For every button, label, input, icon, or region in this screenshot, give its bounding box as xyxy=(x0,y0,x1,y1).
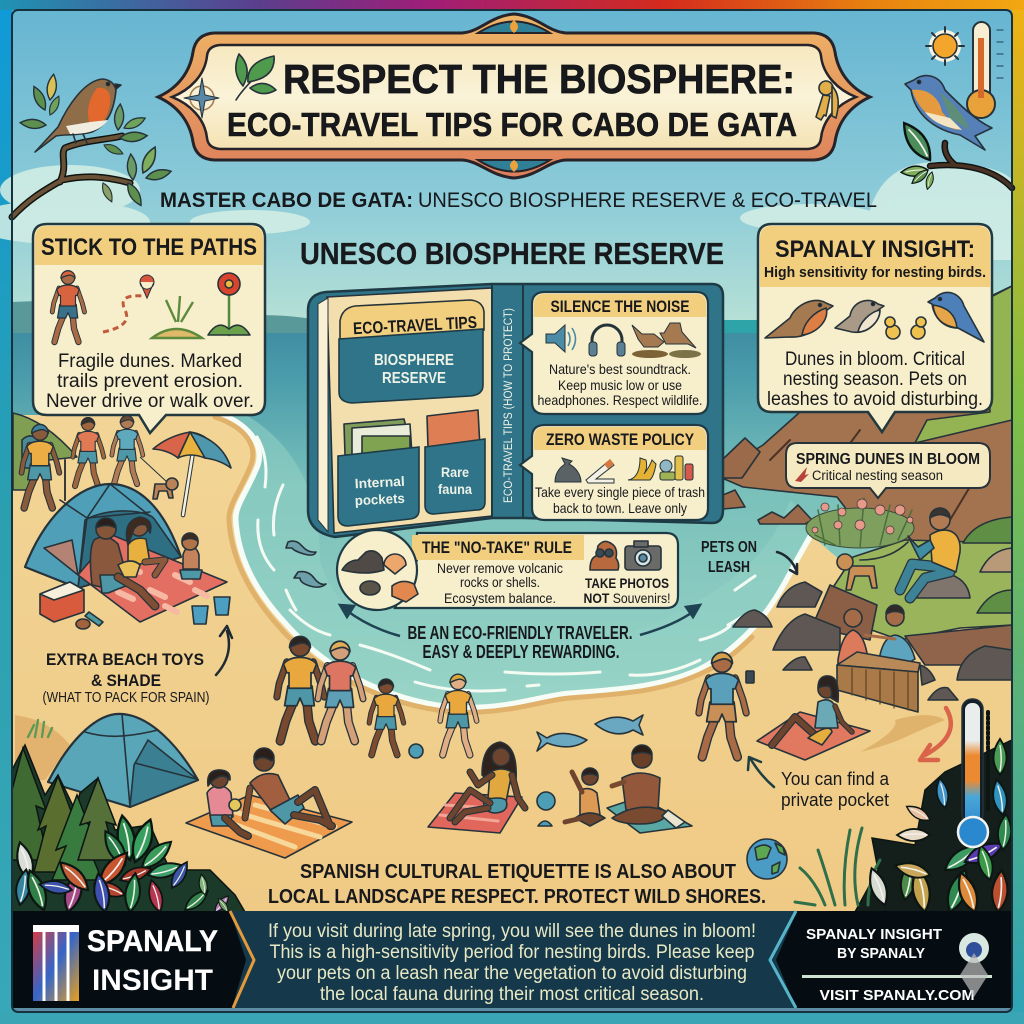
credit text: SPANALY INSIGHT xyxy=(806,926,942,943)
icon: flower xyxy=(208,273,250,335)
heading: ZERO WASTE POLICY xyxy=(546,430,695,449)
branch with bluebird xyxy=(897,76,1012,190)
sand beach xyxy=(12,415,1012,915)
people at kiosk xyxy=(838,605,915,670)
label: pets on leash: LEASH xyxy=(708,559,750,576)
footer message: This is a high-sensitivity period for nesting birds. Please keep xyxy=(270,942,754,963)
flower bush xyxy=(806,498,914,548)
etiquette text: LOCAL LANDSCAPE RESPECT. PROTECT WILD SHORES. xyxy=(268,886,766,908)
branch with robin xyxy=(12,74,172,217)
card: zero waste policy: back to town. Leave only xyxy=(553,500,687,516)
icon: bottles xyxy=(660,456,693,480)
brown cliff xyxy=(722,286,1012,545)
dune grass xyxy=(28,720,52,737)
icon: birds on nest xyxy=(632,323,696,348)
cooler and toys xyxy=(40,582,230,629)
shoreline foam xyxy=(215,415,813,710)
body text: Dunes in bloom. Critical xyxy=(785,349,965,370)
eco-friendly text xyxy=(408,623,632,662)
callout: stick to the paths: trails prevent erosion. xyxy=(57,371,243,392)
logo text: SPANALY xyxy=(87,925,218,958)
card: silence the noise xyxy=(520,292,708,414)
couple on blanket xyxy=(207,748,332,836)
icon: speaker xyxy=(546,325,565,352)
shallow water xyxy=(215,400,830,680)
pocket: rare fauna xyxy=(425,439,485,514)
card: zero waste policy xyxy=(520,425,708,520)
icon: compass xyxy=(184,78,219,118)
family on blanket xyxy=(90,517,202,606)
umbrella xyxy=(153,432,231,515)
book: Rare xyxy=(441,465,469,480)
footer banner: INSIGHT xyxy=(92,964,213,997)
heading: THE "NO-TAKE" RULE xyxy=(422,538,572,557)
icon: cigarette xyxy=(586,460,614,483)
brown boulder xyxy=(812,585,877,640)
icon: dune grass xyxy=(152,296,202,338)
icon: robin xyxy=(35,79,121,152)
icon: birds xyxy=(765,292,984,342)
tan rock xyxy=(980,548,1012,572)
subtitle: UNESCO BIOSPHERE RESERVE & ECO-TRAVEL xyxy=(418,189,877,212)
arrow right xyxy=(640,605,700,635)
label: private pocket: private pocket xyxy=(781,789,889,810)
sea xyxy=(12,333,1012,720)
subtitle: MASTER CABO DE GATA: xyxy=(160,189,413,212)
panel: no-take rule: Ecosystem balance. xyxy=(444,591,556,606)
callout: stick to the paths: Never drive or walk over. xyxy=(46,391,254,412)
logo mark xyxy=(33,925,79,1001)
right bush xyxy=(795,739,1013,915)
body text: Nature's best soundtrack. xyxy=(549,361,691,377)
subtitle xyxy=(160,189,877,212)
icon: trash bag xyxy=(555,458,581,482)
label: beach toys: & SHADE xyxy=(91,671,161,690)
child and man sitting xyxy=(565,745,692,833)
book: fauna xyxy=(438,482,472,497)
heading: SPRING DUNES IN BLOOM xyxy=(796,451,980,468)
arrow left xyxy=(340,605,400,636)
left hill xyxy=(13,413,77,490)
small dome tent xyxy=(48,714,198,807)
sky xyxy=(12,10,1012,320)
right headland cliffs xyxy=(722,286,1012,665)
heading: UNESCO: UNESCO BIOSPHERE RESERVE xyxy=(300,236,724,271)
icon: banana peel xyxy=(628,458,656,480)
body text: Never remove volcanic xyxy=(437,561,563,576)
arrow pets xyxy=(777,552,797,574)
etiquette text xyxy=(268,861,766,908)
checkered blanket xyxy=(78,535,227,622)
icon: route xyxy=(103,296,143,332)
dog on leash xyxy=(837,542,908,590)
arrow pocket xyxy=(748,757,774,787)
footer message: your pets on a leash near the vegetation to avoid disturbing xyxy=(277,963,747,984)
tab heading xyxy=(340,300,484,340)
icon: swirl logo xyxy=(959,933,989,997)
heading: SPANALY INSIGHT: xyxy=(775,236,975,263)
credit text xyxy=(802,926,992,1004)
pine trees xyxy=(12,748,116,880)
footer message: the local fauna during their most critical season. xyxy=(320,984,704,1005)
arrow toys xyxy=(216,626,232,675)
green slope xyxy=(915,286,1012,443)
etiquette text: SPANISH CULTURAL ETIQUETTE IS ALSO ABOUT xyxy=(300,861,736,883)
thermometer lower xyxy=(958,699,988,847)
reader with book xyxy=(900,508,970,598)
beach tent xyxy=(25,484,181,588)
book xyxy=(308,284,723,537)
eco-friendly text: BE AN ECO-FRIENDLY TRAVELER. xyxy=(408,623,632,643)
red arrow xyxy=(920,708,951,760)
credit text: VISIT SPANALY.COM xyxy=(820,987,974,1004)
panel: no-take rule: rocks or shells. xyxy=(460,575,540,590)
callout: spring dunes xyxy=(786,443,990,498)
icon: rocks and shells xyxy=(342,551,418,602)
label: beach toys xyxy=(42,650,210,706)
label: beach toys: EXTRA BEACH TOYS xyxy=(46,650,204,669)
fish on sand xyxy=(537,715,643,751)
beach balls xyxy=(409,744,555,826)
callout: spanaly insight xyxy=(758,224,992,432)
label: pets on leash xyxy=(701,539,757,576)
pocket: internal pockets xyxy=(338,447,419,526)
fish in sea left xyxy=(286,541,326,587)
panel: no-take rule xyxy=(337,530,678,610)
icon: binoculars person xyxy=(590,541,619,570)
label: private pocket xyxy=(781,768,890,810)
subheading: High sensitivity for nesting birds. xyxy=(764,264,986,281)
icon: keys xyxy=(816,81,838,120)
card: silence the noise: Keep music low or use xyxy=(558,377,682,393)
body text: Fragile dunes. Marked xyxy=(58,351,242,372)
card: silence the noise: headphones. Respect wildlife. xyxy=(538,392,702,408)
woman on red blanket xyxy=(757,676,870,760)
footer message: If you visit during late spring, you will see the dunes in bloom! xyxy=(268,921,756,942)
text: Critical nesting season xyxy=(812,468,943,483)
pocket: biosphere reserve xyxy=(339,329,483,403)
label: private pocket: You can find a xyxy=(781,768,890,789)
footer message xyxy=(268,921,756,1005)
left page xyxy=(327,288,492,533)
callout: spanaly insight: leashes to avoid disturbing. xyxy=(767,389,983,410)
orange striped blanket xyxy=(186,795,352,858)
distant hills xyxy=(12,301,340,336)
icon: leaves xyxy=(236,54,276,100)
clouds xyxy=(0,162,1012,260)
book: pockets xyxy=(354,491,405,508)
icon: thermometer top xyxy=(967,22,1003,118)
panel: no-take rule: NOT Souvenirs! xyxy=(584,591,671,606)
heading: STICK TO THE PATHS xyxy=(41,234,257,261)
meadow xyxy=(830,540,1012,640)
man walking with phone xyxy=(699,652,754,757)
hikers xyxy=(22,416,178,508)
red towel and woman xyxy=(428,742,525,833)
title plaque xyxy=(158,14,870,178)
book: ECO-TRAVEL TIPS xyxy=(353,313,477,338)
icon: small dog xyxy=(153,478,178,499)
sand dune shadow xyxy=(860,715,945,752)
label: pets on leash: PETS ON xyxy=(701,539,757,556)
callout text: TAKE PHOTOS xyxy=(585,575,669,591)
book: RESERVE xyxy=(382,370,446,387)
body text: Take every single piece of trash xyxy=(535,484,705,500)
book cover xyxy=(308,284,723,537)
globe xyxy=(747,839,787,879)
grass tuft xyxy=(795,828,880,905)
label: beach toys: (WHAT TO PACK FOR SPAIN) xyxy=(42,690,210,706)
icon: sun xyxy=(926,27,964,65)
icon: bluebird xyxy=(905,76,992,150)
bushes xyxy=(963,517,1012,613)
spine label: ECO-TRAVEL TIPS (HOW TO PROTECT) xyxy=(503,308,515,503)
wet sand band xyxy=(215,417,752,712)
footer banner xyxy=(13,911,1011,1012)
icon: pin xyxy=(140,275,154,298)
title text: RESPECT THE BIOSPHERE: xyxy=(283,56,795,102)
small islets xyxy=(723,490,812,524)
left forest and bush xyxy=(12,745,245,914)
sea waves xyxy=(257,437,755,691)
rocks right xyxy=(733,582,1012,700)
callout: stick to the paths xyxy=(33,224,265,433)
eco-friendly text: EASY & DEEPLY REWARDING. xyxy=(422,642,620,662)
icon: sprig xyxy=(795,467,809,482)
icon: camera xyxy=(625,541,661,570)
credit text: BY SPANALY xyxy=(837,945,925,962)
book: BIOSPHERE xyxy=(374,352,454,369)
callout: spanaly insight: nesting season. Pets on xyxy=(783,369,967,390)
heading: SILENCE THE NOISE xyxy=(550,297,690,316)
icon: hiker xyxy=(52,271,84,342)
title line 2: ECO-TRAVEL TIPS FOR CABO DE GATA xyxy=(227,106,797,143)
walking family xyxy=(277,636,477,755)
kiosk xyxy=(837,652,920,712)
left dune xyxy=(15,715,70,780)
icon: headphones xyxy=(592,325,622,348)
lower brown bank xyxy=(905,625,1012,665)
cards xyxy=(344,410,480,456)
book: Internal xyxy=(354,474,405,491)
